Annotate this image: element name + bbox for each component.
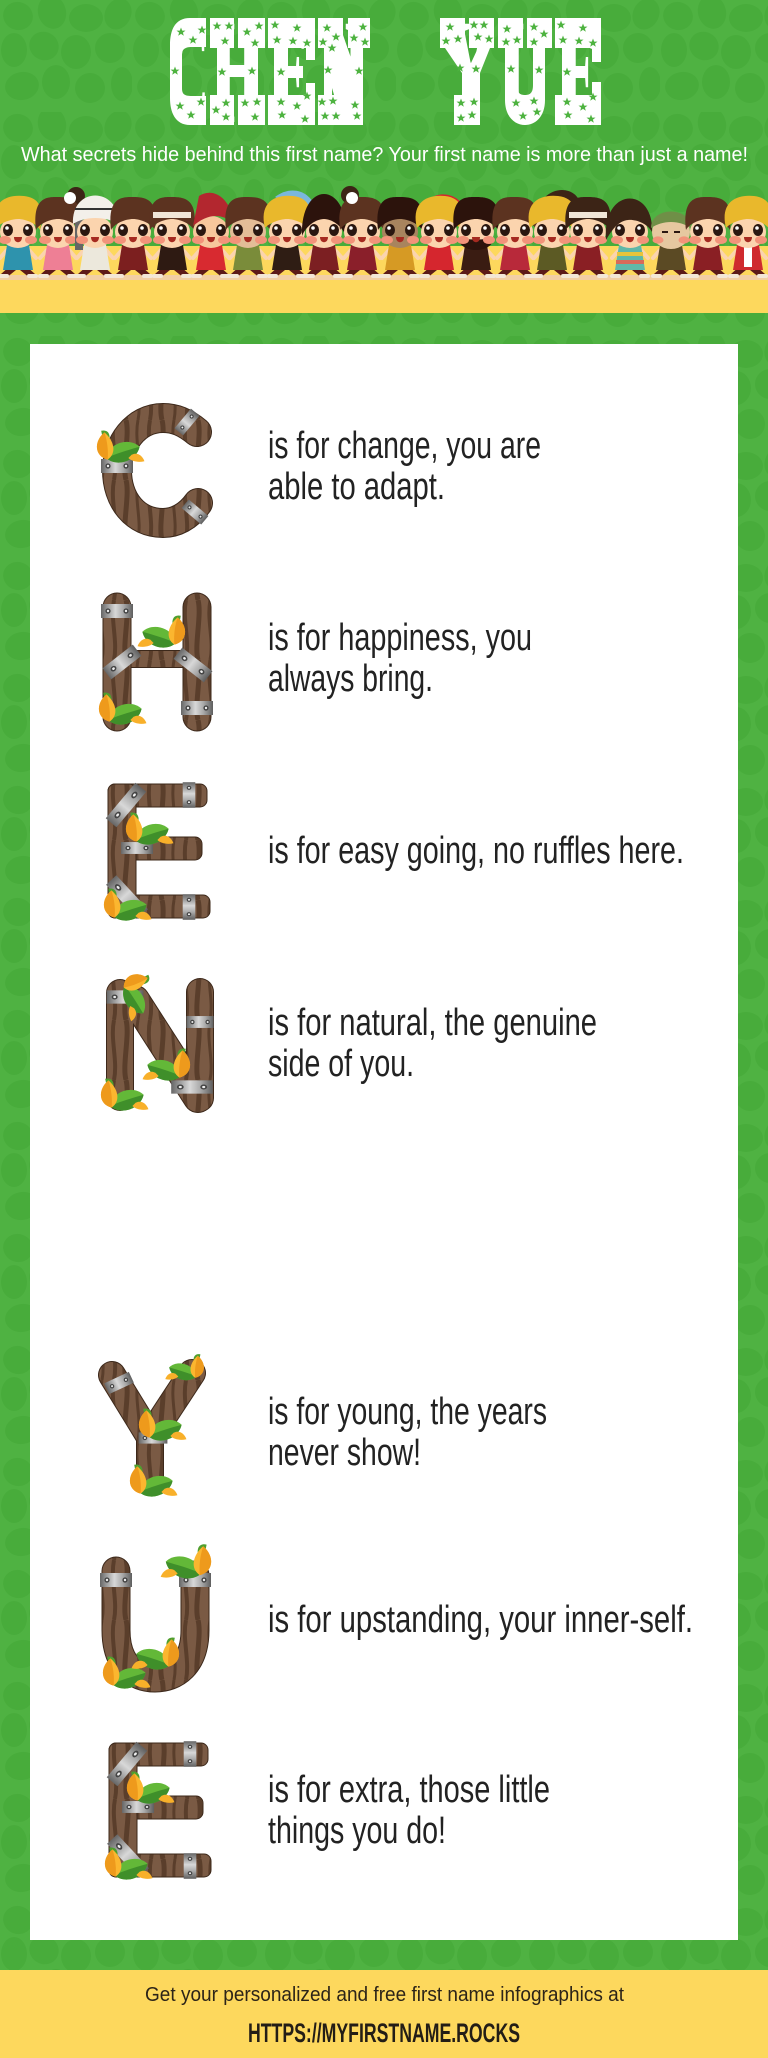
letter N row	[101, 971, 597, 1111]
text: C line: is for change, you are	[268, 425, 541, 467]
text: E second line: is for extra, those little	[268, 1769, 550, 1811]
panel: letters	[30, 344, 738, 1940]
letter H row	[99, 604, 532, 725]
text: C line: able to adapt.	[268, 466, 445, 508]
yellow ribbon band	[0, 246, 768, 313]
letter E row	[104, 782, 684, 921]
icon: wooden letter E	[104, 782, 210, 921]
text: C line	[268, 425, 541, 508]
text: E second line	[268, 1769, 550, 1852]
footer band	[0, 1970, 768, 2058]
icon: wooden letter Y	[104, 1354, 204, 1497]
title	[170, 0, 601, 155]
footer url: HTTPS://MYFIRSTNAME.ROCKS	[248, 2018, 520, 2048]
text: N line: side of you.	[268, 1043, 414, 1085]
text: H line: is for happiness, you	[268, 617, 532, 659]
letter U row	[100, 1544, 693, 1689]
text: Y line: is for young, the years	[268, 1391, 547, 1433]
text: H line	[268, 617, 532, 700]
text: E second line: things you do!	[268, 1810, 446, 1852]
title slab shapes: CHEN	[170, 18, 601, 125]
icon: wooden letter H	[99, 604, 213, 725]
icon: wooden letter U	[100, 1544, 211, 1689]
letter Y row	[104, 1354, 547, 1497]
text: N line: is for natural, the genuine	[268, 1002, 597, 1044]
icon: wooden letter C	[97, 409, 208, 525]
subtitle: What secrets hide behind this first name? Your first name is more than just a name!	[21, 144, 748, 166]
footer text: Get your personalized and free first name infographics at	[145, 1984, 624, 2006]
letter C row	[97, 409, 541, 525]
text: H line: always bring.	[268, 658, 433, 700]
icon: wooden letter N	[101, 971, 214, 1111]
icon: wooden letter E	[105, 1741, 211, 1880]
text: Y line: never show!	[268, 1432, 421, 1474]
letter E row (second)	[105, 1741, 550, 1880]
title stars	[170, 20, 598, 123]
illustration: row of children	[0, 186, 768, 278]
text: N line	[268, 1002, 597, 1085]
text: Y line	[268, 1391, 547, 1474]
